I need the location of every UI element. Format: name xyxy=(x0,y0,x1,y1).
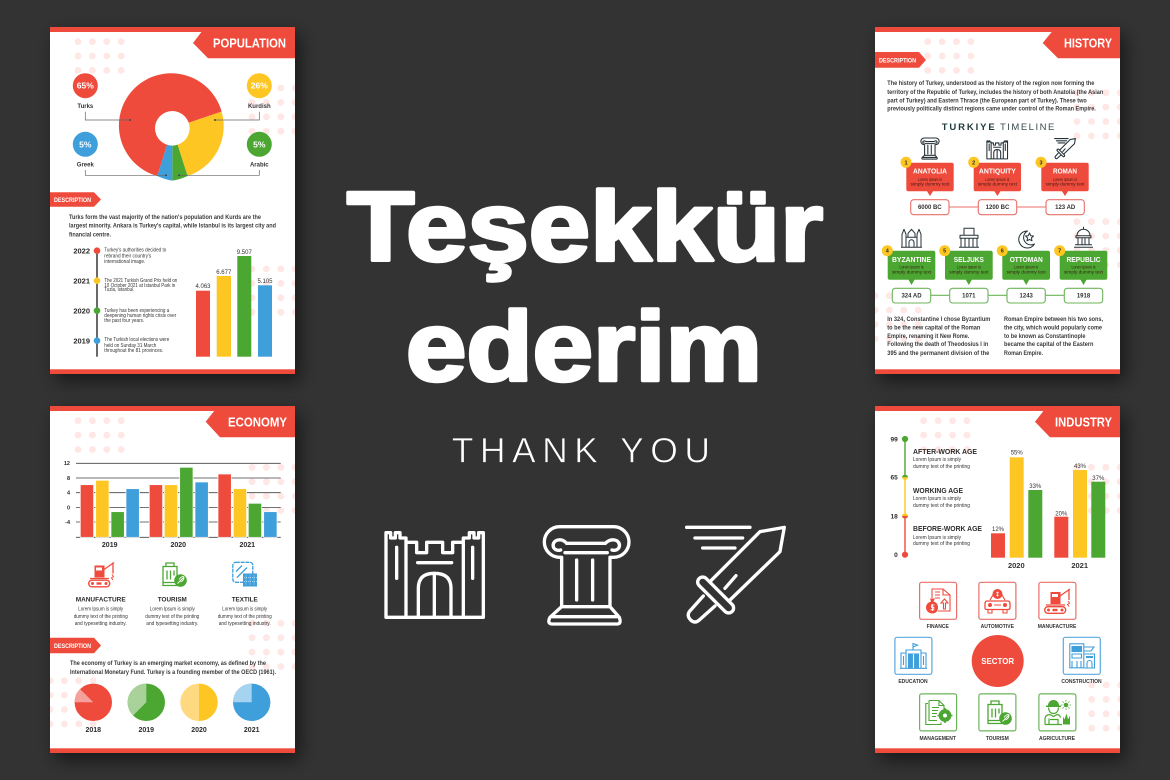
age group: before-work xyxy=(913,526,982,547)
timeline step 6: ottoman xyxy=(997,245,1050,285)
age group: after-work: AFTER-WORK AGE xyxy=(913,449,977,456)
timeline step 6: ottoman: OTTOMAN xyxy=(1010,255,1043,264)
timeline step 1: anatolia: simply dummy text xyxy=(910,182,950,187)
timeline step 2: antiquity: ANTIQUITY xyxy=(979,166,1016,175)
sector: manufacture xyxy=(74,562,128,627)
sector: education: EDUCATION xyxy=(898,679,928,685)
legend: greek xyxy=(73,132,167,176)
description text: previously politically distinct regions came under control of the Roman Empire. xyxy=(887,106,1096,112)
age group: after-work xyxy=(913,449,977,470)
timeline step 2: antiquity: 2 xyxy=(972,160,975,166)
timeline title xyxy=(942,122,1054,133)
description text: part of Turkey) and Eastern Thrace (the European part of Turkey). These two xyxy=(887,98,1087,104)
header: economy: ECONOMY xyxy=(228,414,287,429)
sector: tourism: TOURISM xyxy=(986,736,1009,742)
timeline title: TURKIYE xyxy=(942,122,995,133)
timeline: Turkey's authorities decided to xyxy=(104,248,166,254)
header: industry xyxy=(875,406,1120,437)
grouped bar chart: 2021 xyxy=(240,542,255,549)
description text: largest minority. Ankara is Turkey's capital, while Istanbul is its largest city and xyxy=(69,223,276,229)
timeline: deepening human rights crisis over xyxy=(104,313,177,319)
sector: automotive xyxy=(979,582,1016,630)
age group: before-work: BEFORE-WORK AGE xyxy=(913,526,982,533)
pie: 2020 xyxy=(180,684,218,734)
timeline step 6: ottoman: simply dummy text xyxy=(1007,270,1046,275)
grouped bar chart: 8 xyxy=(67,476,70,482)
sector: manufacture: MANUFACTURE xyxy=(1038,624,1077,630)
timeline step 1: anatolia: 1 xyxy=(904,160,908,166)
pie: 2021: 2021 xyxy=(244,727,260,734)
body text: left column: 395 and the permanent division of the xyxy=(887,351,990,357)
legend: arabic xyxy=(178,132,272,176)
timeline step 5: seljuks: 5 xyxy=(943,249,946,255)
timeline: The 2021 Turkish Grand Prix held on xyxy=(104,278,177,284)
body text: right column: Roman Empire. xyxy=(1004,351,1043,357)
donut chart: population share xyxy=(119,73,224,181)
timeline step 5: seljuks: SELJUKS xyxy=(954,255,984,264)
age group: working: WORKING AGE xyxy=(913,488,963,495)
sector: textile: Lorem Ipsum is simply xyxy=(222,607,268,613)
timeline step 1: anatolia: ANATOLIA xyxy=(913,166,948,175)
bar chart xyxy=(195,250,273,357)
pie: 2019: 2019 xyxy=(139,727,154,734)
date row 1 xyxy=(911,200,1084,215)
timeline: held on Sunday 31 March xyxy=(104,343,156,349)
body text: left column: Following the death of Theodosius I in xyxy=(887,342,989,348)
age scale: 65 xyxy=(890,475,898,482)
sector: manufacture: MANUFACTURE xyxy=(76,597,126,604)
timeline step 3: roman: simply dummy text xyxy=(1046,182,1085,187)
icon: column xyxy=(921,138,939,159)
timeline step 4: byzantine: BYZANTINE xyxy=(892,255,931,264)
grouped bar chart: 4 xyxy=(67,491,71,497)
age group: before-work: dummy text of the printing xyxy=(913,541,970,547)
sector: tourism: TOURISM xyxy=(158,597,187,604)
title xyxy=(347,172,823,402)
bar chart: 4.063 xyxy=(195,284,211,290)
sector centre: SECTOR xyxy=(981,656,1014,666)
date row 2: 324 AD xyxy=(901,294,922,300)
sector: tourism: dummy text of the printing xyxy=(145,614,200,620)
timeline: 2020 xyxy=(73,306,90,315)
sector: textile xyxy=(218,562,272,627)
sector: construction xyxy=(1061,637,1102,685)
date row 1: 123 AD xyxy=(1055,205,1076,211)
sector: finance: FINANCE xyxy=(927,624,949,630)
body text: left column: In 324, Constantine I chose Byzantium xyxy=(887,317,990,323)
age scale: 18 xyxy=(890,513,898,520)
header: history: HISTORY xyxy=(1064,36,1112,50)
sector: construction: CONSTRUCTION xyxy=(1061,679,1102,685)
timeline step 3: roman: 3 xyxy=(1039,160,1043,166)
bar chart xyxy=(991,451,1105,570)
timeline: Tuzla, Istanbul. xyxy=(104,287,134,293)
timeline step 6: ottoman: Lorem Ipsum is xyxy=(1014,265,1039,270)
age group: working xyxy=(913,488,970,509)
description text: territory of the Republic of Turkey, includes the history of both Anatolia (the Asian xyxy=(887,90,1104,96)
timeline step 6: ottoman: 6 xyxy=(1001,249,1004,255)
header: industry: INDUSTRY xyxy=(1055,414,1112,429)
age group: before-work: Lorem Ipsum is simply xyxy=(913,535,961,541)
legend: arabic: 5% xyxy=(253,139,266,149)
bar chart: 55% xyxy=(1011,451,1023,457)
header: history xyxy=(875,27,1120,58)
bar chart: 5.105 xyxy=(257,279,273,285)
date row 2: 1918 xyxy=(1077,294,1091,300)
description text xyxy=(887,81,1104,112)
timeline: 2022 xyxy=(73,246,90,255)
bar chart: 12% xyxy=(992,527,1005,533)
timeline: 2019 xyxy=(73,336,90,345)
body text: right column xyxy=(1004,317,1103,357)
icon: sword xyxy=(1055,139,1075,159)
sector: agriculture: AGRICULTURE xyxy=(1039,736,1076,742)
legend: kurdish: 26% xyxy=(251,81,268,91)
timeline: The Turkish local elections were xyxy=(104,337,169,343)
bar chart: 2021 xyxy=(1071,561,1088,570)
date row 2: 1071 xyxy=(962,294,976,300)
sector centre xyxy=(972,635,1024,687)
timeline title: TIMELINE xyxy=(1000,122,1054,133)
body text: left column: Empire, renaming it New Rome. xyxy=(887,334,970,340)
description tag: DESCRIPTION xyxy=(54,643,91,650)
description tag: DESCRIPTION xyxy=(879,57,916,64)
body text: right column: to be known as Constantinople xyxy=(1004,334,1086,340)
timeline step 1: anatolia xyxy=(900,157,954,196)
grouped bar chart: 2020 xyxy=(171,542,186,549)
legend: turks xyxy=(73,73,131,121)
description text: The history of Turkey, understood as the history of the region now forming the xyxy=(887,81,1095,87)
sector: automotive: AUTOMOTIVE xyxy=(981,624,1015,630)
age scale xyxy=(890,436,908,559)
grouped bar chart xyxy=(64,461,281,549)
timeline step 4: byzantine: simply dummy text xyxy=(892,270,932,275)
timeline: international image. xyxy=(104,259,145,265)
legend: kurdish: Kurdish xyxy=(248,104,271,110)
description text: Turks form the vast majority of the nation's population and Kurds are the xyxy=(69,215,262,221)
timeline step 7: republic: Lorem Ipsum is xyxy=(1072,265,1096,270)
legend: turks: 65% xyxy=(77,81,94,91)
description text: International Monetary Fund. Turkey is a founding member of the OECD (1961). xyxy=(70,670,276,676)
legend: arabic: Arabic xyxy=(250,162,269,168)
description text xyxy=(69,215,276,238)
age scale: 99 xyxy=(890,436,898,443)
icon: seljuk building xyxy=(959,228,979,247)
bar chart: 43% xyxy=(1074,464,1087,470)
pie: 2020: 2020 xyxy=(191,727,207,734)
panel: history xyxy=(872,27,1124,374)
icon: byzantine palace xyxy=(901,229,922,247)
sector: tourism: and typesetting industry. xyxy=(146,621,198,627)
pie: 2018: 2018 xyxy=(86,727,101,734)
date row 1: 1200 BC xyxy=(986,205,1010,211)
grouped bar chart: -4 xyxy=(65,520,71,526)
timeline step 3: roman: ROMAN xyxy=(1053,166,1077,175)
bar chart: 2020 xyxy=(1008,561,1025,570)
age group: working: Lorem Ipsum is simply xyxy=(913,496,961,502)
icon: dome xyxy=(1074,227,1093,247)
description text: financial centre. xyxy=(69,232,111,238)
sector: tourism: Lorem Ipsum is simply xyxy=(150,607,195,613)
timeline step 2: antiquity: simply dummy text xyxy=(978,182,1018,187)
grouped bar chart: 0 xyxy=(67,505,70,511)
description text: The economy of Turkey is an emerging market economy, as defined by the xyxy=(70,661,267,667)
timeline step 4: byzantine: Lorem Ipsum is xyxy=(900,265,924,270)
legend: greek: 5% xyxy=(79,139,92,149)
sector: tourism xyxy=(979,694,1016,742)
age scale: 0 xyxy=(894,552,898,559)
date row 2 xyxy=(892,288,1103,303)
sector: education xyxy=(895,637,932,685)
icon: castle xyxy=(386,533,483,617)
header: economy xyxy=(50,406,295,437)
grouped bar chart: 2019 xyxy=(102,542,118,549)
sector: management xyxy=(920,694,957,742)
timeline step 5: seljuks: Lorem Ipsum is xyxy=(957,265,981,270)
title: ederim xyxy=(406,292,762,402)
sector: textile: and typesetting industry. xyxy=(219,621,271,627)
pie: 2018 xyxy=(75,684,112,734)
icon: crescent xyxy=(1019,231,1034,248)
panel: economy xyxy=(47,406,299,753)
bar chart: 9.507 xyxy=(237,250,252,256)
description text xyxy=(70,661,276,676)
description tag xyxy=(50,192,101,207)
date row 2: 1243 xyxy=(1020,294,1034,300)
icon: castle xyxy=(987,141,1008,159)
body text: right column: the city, which would popularly come xyxy=(1004,326,1103,332)
grouped bar chart: 12 xyxy=(64,461,70,467)
description tag xyxy=(50,638,101,653)
timeline xyxy=(73,246,177,357)
sector: finance xyxy=(920,582,957,630)
sector: manufacture: dummy text of the printing xyxy=(74,614,128,620)
panel: industry xyxy=(875,406,1138,753)
sector: manufacture xyxy=(1038,582,1077,630)
legend: kurdish xyxy=(214,73,272,121)
body text: left column: to be the new capital of the Roman xyxy=(887,326,981,332)
icon: column xyxy=(544,527,629,624)
pie: 2019 xyxy=(128,684,165,734)
sector: textile: dummy text of the printing xyxy=(218,614,272,620)
date row 1: 6000 BC xyxy=(918,205,942,211)
timeline step 1: anatolia: Lorem Ipsum is xyxy=(918,177,943,182)
description tag xyxy=(875,52,926,68)
panel: population xyxy=(50,27,299,374)
header: population: POPULATION xyxy=(213,36,286,50)
timeline step 4: byzantine: 4 xyxy=(886,249,890,255)
sector: agriculture xyxy=(1039,694,1076,742)
icon: sword xyxy=(687,527,784,622)
timeline: Turkey has been experiencing a xyxy=(104,308,169,314)
bar chart: 6.677 xyxy=(216,270,232,276)
timeline step 5: seljuks xyxy=(939,245,993,285)
bar chart: 33% xyxy=(1029,484,1042,490)
age group: working: dummy text of the printing xyxy=(913,503,970,509)
timeline step 3: roman xyxy=(1036,157,1089,196)
timeline step 7: republic: simply dummy text xyxy=(1064,270,1104,275)
timeline: 2021 xyxy=(73,276,90,285)
timeline step 2: antiquity xyxy=(968,157,1021,196)
age group: after-work: dummy text of the printing xyxy=(913,464,970,470)
bar chart: 20% xyxy=(1055,511,1068,517)
timeline step 7: republic: 7 xyxy=(1058,249,1061,255)
sector: management: MANAGEMENT xyxy=(920,736,956,742)
timeline step 7: republic: REPUBLIC xyxy=(1066,255,1101,264)
timeline step 3: roman: Lorem Ipsum is xyxy=(1053,177,1078,182)
title: Teşekkür xyxy=(347,172,823,282)
legend: turks: Turks xyxy=(77,104,94,110)
sector: textile: TEXTILE xyxy=(232,597,258,604)
timeline: the past four years. xyxy=(104,318,144,324)
pie: 2021 xyxy=(233,684,270,734)
legend: greek: Greek xyxy=(77,162,94,168)
age group: after-work: Lorem Ipsum is simply xyxy=(913,457,961,463)
timeline step 7: republic xyxy=(1054,245,1107,285)
description tag: DESCRIPTION xyxy=(54,197,91,204)
timeline step 4: byzantine xyxy=(882,245,935,285)
body text: right column: became the capital of the Eastern xyxy=(1004,342,1094,348)
header: population xyxy=(50,27,295,58)
bar chart: 37% xyxy=(1092,476,1105,482)
subtitle: THANK YOU xyxy=(452,431,710,471)
timeline step 5: seljuks: simply dummy text xyxy=(949,270,989,275)
timeline: rebrand their country's xyxy=(104,253,152,259)
timeline: 10 October 2021 at Istanbul Park in xyxy=(104,283,175,289)
sector: manufacture: Lorem Ipsum is simply xyxy=(78,607,124,613)
timeline step 2: antiquity: Lorem Ipsum is xyxy=(985,177,1010,182)
sector: manufacture: and typesetting industry. xyxy=(75,621,127,627)
body text: left column xyxy=(887,317,990,357)
timeline: throughout the 81 provinces. xyxy=(104,348,163,354)
sector: tourism xyxy=(145,563,200,627)
body text: right column: Roman Empire between his two sons, xyxy=(1004,317,1103,323)
